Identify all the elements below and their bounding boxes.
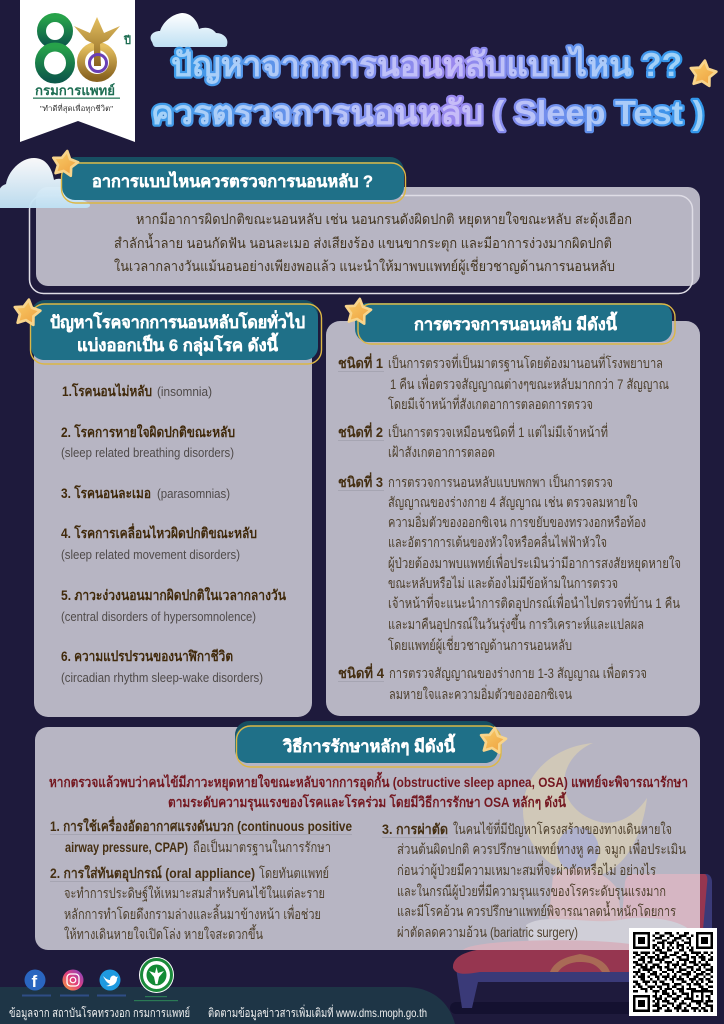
test type 1: โดยมีเจ้าหน้าที่สังเกตอาการตลอดการตรวจ (388, 395, 593, 412)
disorder 6: 6. ความแปรปรวนของนาฬิกาชีวิต (61, 648, 233, 664)
treatment 3: ก่อนว่าผู้ป่วยมีความเหมาะสมที่จะผ่าตัดหรือไม่ อย่างไร (397, 861, 656, 879)
symptoms text (114, 211, 632, 275)
disorder 5 (61, 586, 286, 624)
treatment 1: ถือเป็นมาตรฐานในการรักษา (193, 838, 331, 856)
test type 3: ขณะหลับหรือไม่ และต้องไม่มีข้อห้ามในการตรวจ (388, 575, 618, 591)
symptoms text: หากมีอาการผิดปกติขณะนอนหลับ เช่น นอนกรนดังผิดปกติ หยุดหายใจขณะหลับ สะดุ้งเฮือก (136, 211, 632, 228)
emblem caption (134, 996, 178, 1001)
heading: disorder groups (30, 300, 322, 364)
logo: department name: กรมการแพทย์ (35, 83, 115, 98)
heading: disorder groups: แบ่งออกเป็น 6 กลุ่มโรค ดังนี้ (77, 332, 278, 356)
treatment 2: จะทำการประดิษฐ์ให้เหมาะสมสำหรับคนไข้ในแต่ละราย (64, 885, 325, 902)
title line 2: ควรตรวจการนอนหลับ ( Sleep Test ) (151, 94, 704, 131)
social labels (22, 994, 126, 996)
test type 4: ลมหายใจและความอิ่มตัวของออกซิเจน (389, 685, 572, 702)
panel outline (30, 196, 692, 294)
treatment 1: 1. การใช้เครื่องอัดอากาศแรงดันบวก (continuous positive (50, 816, 352, 834)
test type 3: การตรวจการนอนหลับแบบพกพา เป็นการตรวจ (388, 473, 613, 490)
illustration: bed base and headboard (450, 874, 712, 1014)
test type 3: สัญญาณของร่างกาย 4 สัญญาณ เช่น ตรวจลมหายใจ (388, 494, 638, 510)
treatment intro: ตามระดับความรุนแรงของโรคและโรคร่วม โดยมีวิธีการรักษา OSA หลักๆ ดังนี้ (168, 791, 566, 811)
treatment 2: โดยทันตแพทย์ (259, 865, 329, 881)
disorder 1: 1.โรคนอนไม่หลับ (62, 382, 152, 399)
test type 2: เป็นการตรวจเหมือนชนิดที่ 1 แต่ไม่มีเจ้าหน้าที่ (388, 423, 608, 440)
title line 1: ปัญหาจากการนอนหลับแบบไหน ?? (171, 45, 682, 84)
footer source text: ข้อมูลจาก สถาบันโรคทรวงอก กรมการแพทย์ (9, 1006, 190, 1021)
logo ribbon (20, 0, 135, 142)
heading: symptoms: อาการแบบไหนควรตรวจการนอนหลับ ? (92, 171, 373, 191)
logo: green eight (40, 18, 70, 79)
test type 2 (338, 422, 608, 460)
test type 4: การตรวจสัญญาณของร่างกาย 1-3 สัญญาณ เพื่อตรวจ (389, 664, 647, 681)
test type 4 (338, 663, 647, 702)
disorder 2: (sleep related breathing disorders) (61, 446, 234, 460)
disorder 6 (61, 648, 263, 685)
disorder 5: (central disorders of hypersomnolence) (61, 610, 256, 624)
icon: facebook: f (32, 972, 38, 991)
icon: ministry emblem (139, 957, 174, 993)
heading: treatment (235, 721, 501, 767)
footer band (0, 987, 455, 1024)
treatment 1 (50, 816, 352, 856)
test type 3: และอัตราการเต้นของหัวใจหรือคลื่นไฟฟ้าหัวใจ (388, 533, 607, 550)
panel: treatment (35, 727, 700, 950)
test type 1: ชนิดที่ 1 (338, 353, 383, 371)
test type 4: ชนิดที่ 4 (338, 663, 384, 681)
heading: sleep test types (355, 303, 675, 344)
disorder 2 (61, 423, 235, 460)
treatment 2: ให้ทางเดินหายใจเปิดโล่ง หายใจสะดวกขึ้น (64, 924, 263, 942)
test type 3: ชนิดที่ 3 (338, 472, 383, 490)
test type 3: และมาคืนอุปกรณ์ในวันรุ่งขึ้น การวิเคราะห์และแปลผล (388, 614, 644, 633)
icon: twitter (100, 970, 120, 990)
illustration: crescent moon (523, 743, 647, 876)
heading: symptoms (62, 157, 406, 203)
disorder 3: 3. โรคนอนละเมอ (61, 484, 151, 501)
treatment 2: หลักการทำโดยดึงกรามล่างและลิ้นมาข้างหน้า เพื่อช่วย (64, 904, 321, 922)
logo: year label: ปี (123, 34, 131, 47)
disorder 3: (parasomnias) (157, 487, 230, 501)
heading: treatment: วิธีการรักษาหลักๆ มีดังนี้ (283, 733, 455, 756)
heading: disorder groups: ปัญหาโรคจากการนอนหลับโดยทั่วไป (50, 310, 305, 333)
test type 3: ความอิ่มตัวของออกซิเจน การขยับของทรวงอกหรือท้อง (388, 513, 646, 530)
test type 3: โดยแพทย์ผู้เชี่ยวชาญด้านการนอนหลับ (388, 636, 572, 654)
treatment 2: 2. การใส่ทันตอุปกรณ์ (oral appliance) (50, 864, 255, 882)
treatment intro (49, 771, 688, 811)
test type 2: ชนิดที่ 2 (338, 422, 383, 440)
icon: left cloud (0, 158, 90, 208)
icon: symptoms star (51, 149, 80, 177)
panel: disorder groups (34, 340, 312, 717)
symptoms text: ในเวลากลางวันแม้นอนอย่างเพียงพอแล้ว แนะนำให้มาพบแพทย์ผู้เชี่ยวชาญด้านการนอนหลับ (114, 257, 615, 275)
heading: sleep test types: การตรวจการนอนหลับ มีดังนี้ (414, 311, 617, 334)
icon: treatment star (479, 726, 507, 753)
panel: symptoms (30, 187, 700, 294)
title (151, 45, 704, 131)
icon: instagram (62, 970, 84, 990)
disorder 4: (sleep related movement disorders) (61, 548, 240, 562)
treatment 3: 3. การผ่าตัด (382, 821, 448, 837)
disorder 2: 2. โรคการหายใจผิดปกติขณะหลับ (61, 423, 235, 440)
logo: divider (33, 98, 120, 99)
disorder 3 (61, 484, 230, 501)
treatment 3 (382, 820, 686, 940)
symptoms text: สำลักน้ำลาย นอนกัดฟัน นอนละเมอ ส่งเสียงร้อง แขนขากระตุก และมีอาการง่วงมากผิดปกติ (114, 233, 612, 252)
icon: tests star (344, 297, 372, 324)
test type 3 (338, 472, 681, 654)
disorder 1 (62, 382, 212, 399)
logo: slogan: "ทำดีที่สุดเพื่อทุกชีวิต" (40, 103, 113, 113)
disorder 4 (61, 523, 257, 562)
treatment 2 (50, 864, 329, 942)
test type 2: เฝ้าสังเกตอาการตลอด (388, 444, 495, 460)
disorder 6: (circadian rhythm sleep-wake disorders) (61, 671, 263, 685)
panel: sleep test types (326, 321, 700, 716)
treatment 3: ผ่าตัดลดความอ้วน (bariatric surgery) (397, 924, 578, 940)
disorder 5: 5. ภาวะง่วงนอนมากผิดปกติในเวลากลางวัน (61, 586, 286, 603)
icon: title star (689, 59, 718, 87)
disorder 4: 4. โรคการเคลื่อนไหวผิดปกติขณะหลับ (61, 523, 257, 541)
logo: gold emblem (74, 17, 120, 78)
QR code (629, 928, 717, 1016)
icon: facebook (24, 970, 46, 991)
icon: disorder star (13, 298, 42, 326)
icon: top cloud (151, 13, 227, 47)
illustration: person and pillow (463, 827, 700, 950)
treatment 1: airway pressure, CPAP) (65, 839, 188, 855)
test type 1 (338, 353, 669, 412)
disorder 1: (insomnia) (157, 385, 212, 399)
footer contact text: ติดตามข้อมูลข่าวสารเพิ่มเติมที่ www.dms.moph.go.th (208, 1004, 427, 1021)
